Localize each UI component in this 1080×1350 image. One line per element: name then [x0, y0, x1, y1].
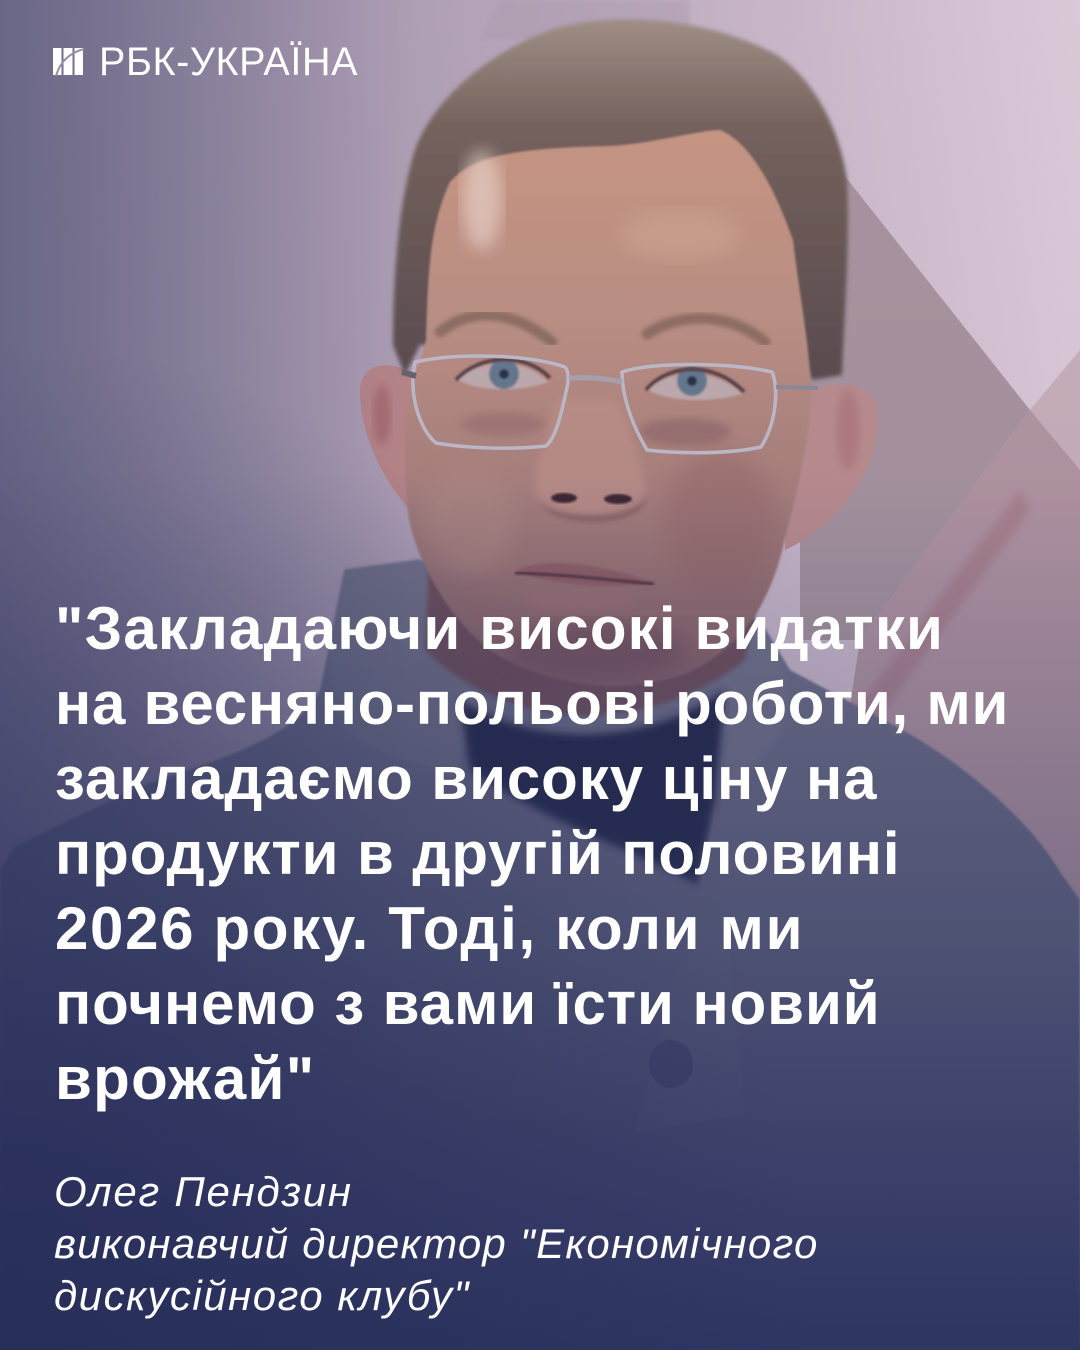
- background diamonds: [480, 0, 1080, 900]
- ears: [360, 365, 878, 550]
- author attribution: дискусійного клубу": [54, 1272, 470, 1319]
- quote text: 2026 року. Тоді, коли ми: [55, 895, 804, 962]
- face: [405, 130, 811, 686]
- quote text: на весняно-польові роботи, ми: [55, 670, 1009, 737]
- quote text: "Закладаючи високі видатки: [55, 595, 944, 662]
- quote text: продукти в другій половині: [55, 820, 900, 887]
- icon: РБК logo mark: [53, 48, 84, 76]
- quote text: почнемо з вами їсти новий: [55, 970, 881, 1037]
- logo wordmark: РБК-УКРАЇНА: [99, 40, 358, 84]
- forehead highlight: [462, 150, 740, 260]
- eyebrows: [440, 315, 765, 342]
- quote text: [55, 595, 1009, 1112]
- author attribution: виконавчий директор "Економічного: [54, 1220, 819, 1267]
- mouth: [515, 563, 654, 610]
- neck: [425, 540, 770, 715]
- sweater: [0, 560, 1080, 1350]
- logo: [53, 40, 358, 84]
- hair: [393, 19, 848, 380]
- eyes: [456, 359, 744, 446]
- quote text: врожай": [55, 1045, 315, 1112]
- cheeks and shadows: [665, 450, 775, 590]
- quote text: закладаємо високу ціну на: [55, 745, 877, 812]
- author attribution: Олег Пендзин: [54, 1168, 353, 1215]
- nose: [535, 400, 648, 522]
- author attribution: [54, 1168, 819, 1319]
- glasses: [402, 356, 818, 453]
